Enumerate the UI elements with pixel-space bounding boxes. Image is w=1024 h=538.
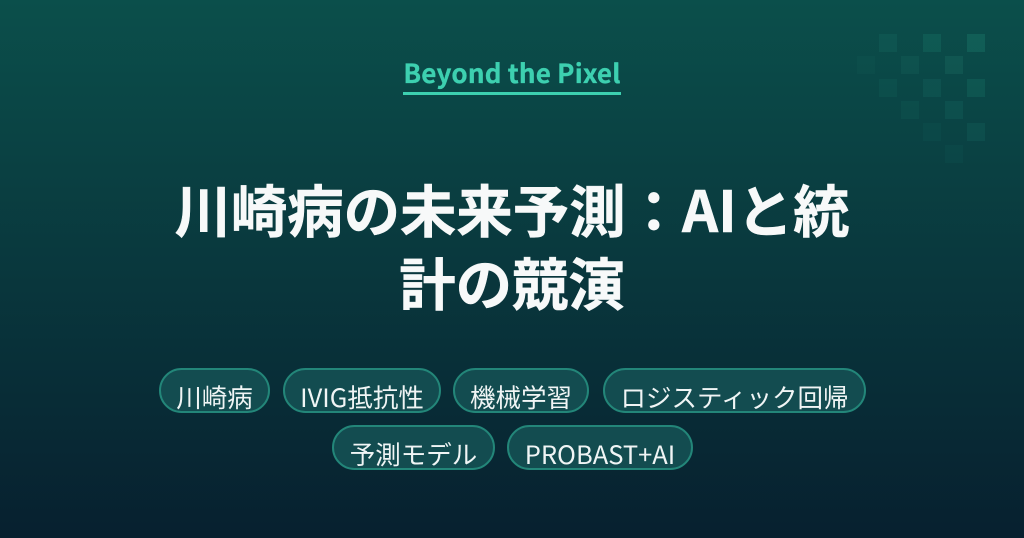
tag: IVIG抵抗性: IVIG抵抗性: [300, 378, 424, 415]
tag: 予測モデル: [332, 425, 495, 470]
tag: 川崎病: 川崎病: [176, 378, 253, 415]
title: 計の競演: [399, 241, 625, 322]
tag: 川崎病: [159, 368, 270, 413]
tag list: [159, 368, 866, 472]
decorative square pattern: [879, 34, 985, 141]
title: 川崎病の未来予測：AIと統: [174, 168, 850, 249]
tag: IVIG抵抗性: [283, 368, 441, 413]
title: [174, 168, 850, 322]
eyebrow: Beyond the Pixel: Beyond the Pixel: [403, 54, 621, 91]
tag: 予測モデル: 予測モデル: [350, 435, 477, 472]
tag: 機械学習: [453, 368, 589, 413]
tag: PROBAST+AI: [507, 425, 693, 470]
tag: ロジスティック回帰: ロジスティック回帰: [620, 378, 848, 415]
tag: PROBAST+AI: PROBAST+AI: [525, 435, 675, 472]
tag: 機械学習: 機械学習: [470, 378, 572, 415]
tag: ロジスティック回帰: [603, 368, 866, 413]
